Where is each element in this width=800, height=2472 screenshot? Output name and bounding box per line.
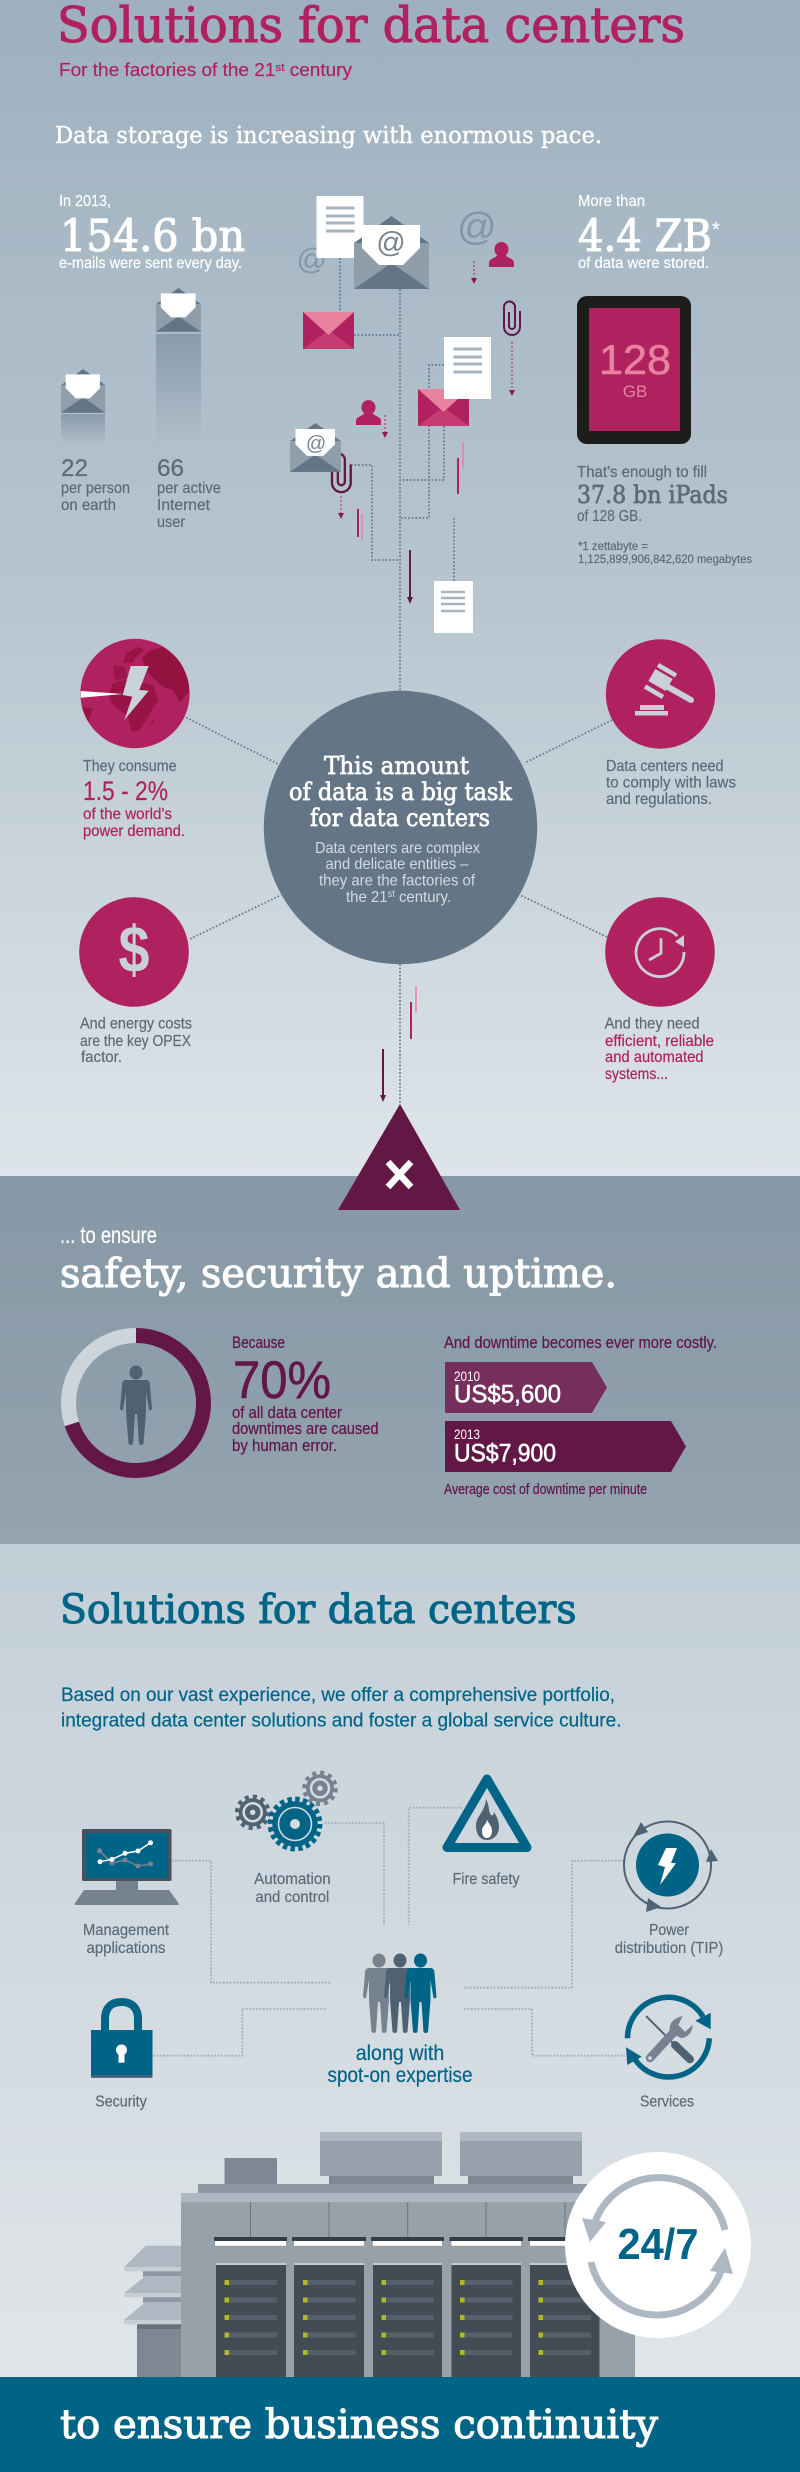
storage headline: of data were stored.	[578, 255, 709, 272]
bar 2010: US$5,600	[454, 1381, 561, 1409]
e-mail headline	[59, 193, 245, 272]
iPad comparison	[577, 464, 728, 525]
storage headline: 4.4 ZB	[578, 211, 712, 262]
rooftop units	[224, 2132, 582, 2185]
icon: padlock	[91, 2002, 152, 2078]
paper clip	[504, 302, 520, 335]
centre circle: for data centers	[310, 804, 490, 832]
solutions section background	[0, 1544, 800, 2377]
footnote: 1,125,899,906,842,620 megabytes	[578, 552, 752, 566]
pink envelope	[303, 312, 354, 349]
automated text: efficient, reliable	[605, 1033, 714, 1050]
vents	[214, 2237, 602, 2246]
icon: fire triangle	[447, 1779, 527, 1848]
badge: 24/7: 24/7	[618, 2220, 698, 2269]
power demand text: power demand.	[83, 823, 185, 840]
panel: e-mail stats	[59, 193, 245, 531]
pink motion lines	[362, 442, 463, 541]
dark pink motion lines	[358, 458, 458, 537]
icon: gavel	[606, 639, 715, 749]
bar 2013: US$7,900	[454, 1440, 556, 1468]
label	[328, 2042, 472, 2087]
at sign right: @	[457, 206, 497, 249]
centre circle: the 21	[346, 889, 390, 906]
downtime cost chart: Average cost of downtime per minute	[444, 1481, 647, 1498]
e-mail headline: 154.6 bn	[60, 211, 245, 262]
icon: clock	[605, 897, 715, 1007]
label	[254, 1871, 331, 1906]
label: spot-on expertise	[328, 2064, 472, 2087]
energy text: are the key OPEX	[80, 1033, 191, 1050]
icon: tools ring	[626, 1997, 711, 2077]
bar: 66 per active user: 66	[157, 455, 184, 482]
footer banner: to ensure business continuity	[60, 2402, 658, 2448]
footer banner	[0, 2377, 800, 2472]
item: automation and control	[237, 1773, 336, 1906]
human error text: by human error.	[232, 1436, 337, 1455]
centre circle: century.	[395, 889, 451, 906]
centre circle: they are the factories of	[319, 872, 476, 890]
label: and control	[255, 1889, 329, 1906]
iPad comparison: That's enough to fill	[577, 464, 707, 481]
connector lines	[153, 1808, 625, 2056]
purple arrow down	[380, 1049, 386, 1102]
bar: 22 per person: on earth	[61, 497, 116, 514]
storage headline: More than	[578, 193, 645, 210]
small envelope	[290, 423, 341, 472]
power demand text: 1.5 - 2%	[83, 776, 168, 806]
safety band background	[0, 1176, 800, 1544]
icon: tablet 128 GB: GB	[623, 382, 647, 401]
subtitle: century	[284, 60, 352, 80]
label: Services	[640, 2094, 694, 2111]
panel: laws	[606, 639, 736, 808]
power demand text: of the world's	[83, 806, 172, 823]
automated text: systems...	[605, 1066, 668, 1083]
human error text: of all data center	[232, 1403, 342, 1422]
automated text: and automated	[605, 1049, 704, 1066]
label: Power	[649, 1922, 690, 1939]
panel: automated systems	[605, 897, 715, 1083]
dark motion line	[410, 1002, 412, 1039]
storage headline: *	[712, 219, 720, 241]
donut chart 70 percent	[68, 1336, 204, 1470]
solutions intro	[61, 1685, 622, 1732]
small envelope: @	[306, 433, 326, 455]
human error text	[232, 1333, 378, 1455]
panel: storage stats	[577, 193, 752, 566]
bar 2013	[445, 1421, 686, 1472]
label: Automation	[254, 1871, 331, 1888]
icon: gears	[237, 1773, 336, 1849]
illustration: data center building	[124, 2132, 635, 2377]
large envelope: @	[376, 227, 406, 259]
item: spot-on expertise	[328, 1954, 472, 2087]
label: Fire safety	[452, 1871, 520, 1888]
energy text	[80, 1016, 192, 1066]
centre circle	[264, 691, 537, 964]
power demand text: They consume	[83, 758, 177, 775]
icon: monitor	[75, 1829, 178, 1905]
person icon	[489, 242, 514, 267]
label: Security	[95, 2094, 147, 2111]
icon: three people	[363, 1954, 436, 2033]
centre circle: This amount	[324, 752, 469, 780]
document 3	[434, 581, 473, 633]
at sign left: @	[296, 243, 327, 276]
automated text	[605, 1016, 714, 1083]
safety heading: ... to ensure	[60, 1222, 157, 1248]
item: management applications	[75, 1829, 178, 1957]
downtime cost chart: And downtime becomes ever more costly.	[444, 1333, 717, 1352]
solutions heading: Solutions for data centers	[60, 1587, 576, 1633]
large envelope	[354, 216, 429, 289]
centre circle: st	[388, 889, 395, 900]
laws text	[606, 758, 736, 808]
bar 2013: 2013	[454, 1426, 480, 1442]
data flow illustration	[290, 196, 520, 691]
dashed arrows	[338, 261, 515, 519]
solutions intro: integrated data center solutions and foster a global service culture.	[61, 1711, 622, 1732]
item: security	[91, 2002, 152, 2111]
storage headline	[578, 193, 720, 272]
document 1	[316, 196, 364, 258]
bar: 22 per person: 22	[61, 455, 88, 482]
bar: 66 per active user	[156, 288, 221, 531]
e-mail headline: e-mails were sent every day.	[59, 255, 242, 272]
iPad comparison: 37.8 bn iPads	[577, 481, 728, 509]
icon: dollar	[79, 897, 189, 1007]
bar 2010: 2010	[454, 1368, 480, 1384]
subtitle: st	[275, 62, 284, 74]
motion lines below circle	[415, 986, 417, 1012]
document 2	[444, 337, 491, 399]
triangle with cross	[338, 1104, 460, 1210]
label	[83, 1922, 170, 1957]
item: fire safety	[447, 1779, 527, 1888]
automated text: And they need	[605, 1016, 700, 1033]
solutions intro: Based on our vast experience, we offer a comprehensive portfolio,	[61, 1685, 615, 1706]
purple arrow	[407, 550, 413, 604]
centre circle: Data centers are complex	[315, 840, 480, 857]
icon: dollar: $	[118, 912, 150, 986]
person icon 2	[356, 400, 381, 425]
label: Management	[83, 1922, 170, 1939]
badge: 24/7	[565, 2152, 751, 2338]
item: services	[626, 1997, 711, 2111]
safety heading: safety, security and uptime.	[60, 1251, 617, 1297]
centre circle: of data is a big task	[289, 778, 512, 806]
label: distribution (TIP)	[615, 1940, 723, 1957]
side shelves	[124, 2246, 181, 2377]
laws text: to comply with laws	[606, 774, 736, 792]
downtime cost chart	[444, 1333, 717, 1498]
label: along with	[356, 2042, 444, 2065]
e-mail headline: In 2013,	[59, 193, 111, 210]
connectors to centre circle	[186, 718, 612, 1104]
building body	[181, 2184, 635, 2377]
server racks	[216, 2263, 600, 2377]
bar: 66 per active user: Internet	[157, 497, 211, 514]
label: applications	[86, 1940, 166, 1957]
centre circle: and delicate entities –	[326, 856, 469, 873]
safety heading	[60, 1222, 617, 1297]
icon: tablet 128 GB: 128	[599, 336, 671, 383]
human error text: Because	[232, 1333, 285, 1352]
intro heading: Data storage is increasing with enormous pace.	[55, 123, 602, 149]
icon: tablet 128 GB	[577, 296, 691, 444]
laws text: and regulations.	[606, 791, 712, 808]
footnote: *1 zettabyte =	[578, 539, 648, 553]
subtitle: For the factories of the 21	[59, 60, 264, 80]
item: power distribution	[615, 1822, 723, 1957]
bar: 22 per person: per person	[61, 480, 130, 497]
paper clip 2	[332, 454, 351, 492]
panel: energy costs	[79, 897, 192, 1066]
label	[615, 1922, 723, 1957]
icon: power ring	[624, 1822, 718, 1912]
icon: globe with lightning	[80, 639, 190, 748]
bar: 22 per person	[61, 369, 130, 514]
human error text: downtimes are caused	[232, 1419, 378, 1438]
footnote	[578, 539, 752, 566]
bar 2010	[445, 1362, 607, 1413]
power demand text	[83, 758, 185, 840]
energy text: And energy costs	[80, 1016, 192, 1033]
bar: 66 per active user: user	[157, 514, 186, 531]
page background	[0, 0, 800, 1177]
bar: 66 per active user: per active	[157, 480, 221, 497]
panel: power demand	[80, 639, 190, 840]
pink envelope 2	[418, 389, 469, 426]
iPad comparison: of 128 GB.	[577, 508, 642, 525]
laws text: Data centers need	[606, 758, 724, 775]
human error text: 70%	[233, 1351, 331, 1410]
energy text: factor.	[81, 1049, 122, 1066]
